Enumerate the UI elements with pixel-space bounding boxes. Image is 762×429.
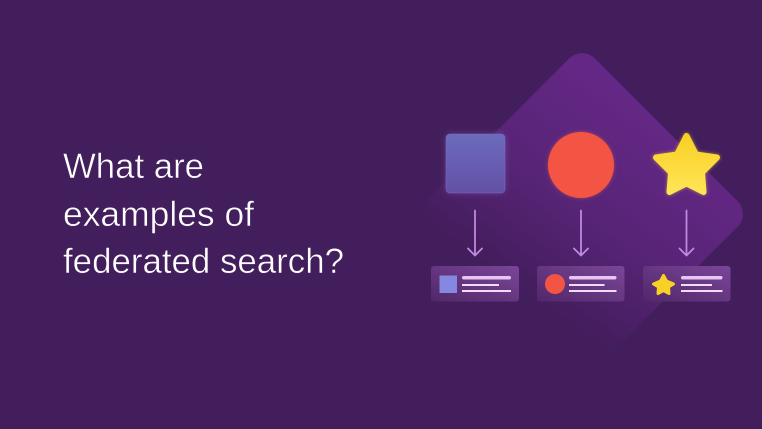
text lines	[462, 276, 511, 292]
icon: star	[656, 136, 717, 192]
diamond backdrop	[414, 46, 750, 382]
card: square result	[431, 266, 519, 302]
title	[63, 147, 344, 281]
card: circle result	[537, 266, 624, 302]
arrow: circle to card	[574, 210, 588, 256]
arrow: square to card	[468, 210, 482, 256]
title: What are	[63, 147, 204, 186]
icon: circle	[547, 131, 615, 199]
text lines	[569, 276, 616, 292]
text lines	[681, 276, 722, 292]
arrow: star to card	[680, 210, 694, 256]
mini circle	[545, 274, 565, 294]
title: examples of	[63, 195, 254, 234]
title: federated search?	[63, 242, 344, 281]
mini square	[440, 276, 457, 293]
icon: square	[445, 133, 506, 194]
card: star result	[643, 266, 730, 302]
mini star	[654, 276, 674, 294]
